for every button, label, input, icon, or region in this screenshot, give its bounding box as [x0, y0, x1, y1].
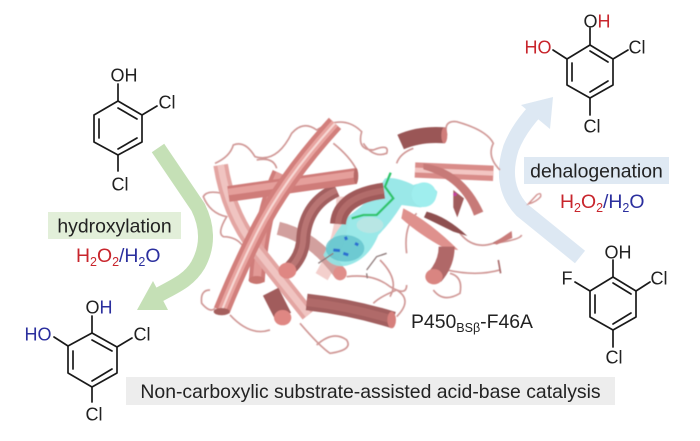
- cavity surface: [323, 178, 437, 266]
- reagents: H2O2/H2O left: H: [76, 245, 90, 267]
- helix: upper right dark: [401, 127, 447, 143]
- reagents: H2O2/H2O left: O: [145, 245, 160, 267]
- helix: pale crossing: [221, 165, 308, 315]
- label: hydroxylation: hydroxylation: [57, 216, 172, 238]
- molecule: hydroxylation product: [24, 298, 150, 424]
- protein label: -F46A: [480, 311, 533, 333]
- beta sheets: [401, 163, 512, 250]
- molecule: dehalogenation product: OH: [583, 12, 611, 32]
- helix: long front: [214, 123, 335, 315]
- substrate ligand: [352, 173, 393, 218]
- molecule: 2,4-dichloro-6-fluorophenol: [562, 242, 668, 368]
- reagents: H2O2/H2O right: O: [629, 191, 644, 213]
- small loop near arrow: [528, 194, 541, 204]
- arrow: dehalogenation (blue): [507, 97, 580, 257]
- helix: bottom long: [307, 302, 396, 328]
- helix: upper right horizontal: [415, 170, 493, 173]
- helix: dark upper arc: [338, 191, 384, 224]
- helix: horizontal: [228, 168, 358, 194]
- protein structure: P450 BSbeta F46A: [201, 121, 541, 353]
- pale back helix: [322, 197, 343, 277]
- reagents: H2O2/H2O right: 2: [622, 201, 629, 215]
- molecule: 2,4-dichlorophenol: Cl: [112, 174, 128, 194]
- caption: Non-carboxylic substrate-assisted acid-base catalysis: [140, 381, 601, 403]
- molecule: 2,4-dichloro-6-fluorophenol: OH: [604, 242, 632, 262]
- reagents: H2O2/H2O right: /H: [603, 191, 622, 213]
- molecule: 2,4-dichloro-6-fluorophenol: F: [562, 268, 572, 288]
- molecule: dehalogenation product: HO: [524, 38, 552, 58]
- molecule: 2,4-dichlorophenol: [94, 66, 176, 194]
- reagents: H2O2/H2O right: O: [581, 191, 596, 213]
- molecule: dehalogenation product: Cl: [628, 38, 646, 58]
- protein label: P450: [411, 311, 456, 333]
- molecule: dehalogenation product: [524, 12, 646, 136]
- molecule: 2,4-dichloro-6-fluorophenol: Cl: [650, 268, 668, 288]
- arrow: hydroxylation (green): [137, 148, 206, 310]
- helix: left vertical: [249, 173, 280, 284]
- helix: dark curve: [278, 190, 337, 279]
- molecule: dehalogenation product: Cl: [584, 116, 600, 136]
- molecule: 2,4-dichlorophenol: Cl: [158, 92, 176, 112]
- molecule: 2,4-dichlorophenol: OH: [110, 66, 138, 86]
- protein label: BSβ: [456, 321, 480, 335]
- reagents: H2O2/H2O left: 2: [90, 255, 97, 269]
- helix: back curve: [278, 228, 347, 280]
- helix: bottom short: [271, 292, 291, 325]
- molecule: hydroxylation product: Cl: [86, 404, 102, 424]
- protein loops: [201, 121, 522, 353]
- reagents: H2O2/H2O right: 2: [574, 201, 581, 215]
- molecule: 2,4-dichloro-6-fluorophenol: Cl: [606, 348, 622, 368]
- label: dehalogenation: dehalogenation: [530, 160, 663, 182]
- molecule: hydroxylation product: HO: [24, 324, 52, 344]
- reagents: H2O2/H2O left: /H: [119, 245, 138, 267]
- heme sticks: [333, 237, 358, 255]
- reagents: H2O2/H2O left: O: [97, 245, 112, 267]
- reagents: H2O2/H2O right: H: [560, 191, 574, 213]
- reagents: H2O2/H2O right: 2: [596, 201, 603, 215]
- reagents: H2O2/H2O left: 2: [138, 255, 145, 269]
- reagents: H2O2/H2O left: 2: [112, 255, 119, 269]
- molecule: hydroxylation product: Cl: [134, 324, 150, 344]
- molecule: hydroxylation product: OH: [85, 298, 113, 318]
- helix: lower right: [425, 247, 447, 284]
